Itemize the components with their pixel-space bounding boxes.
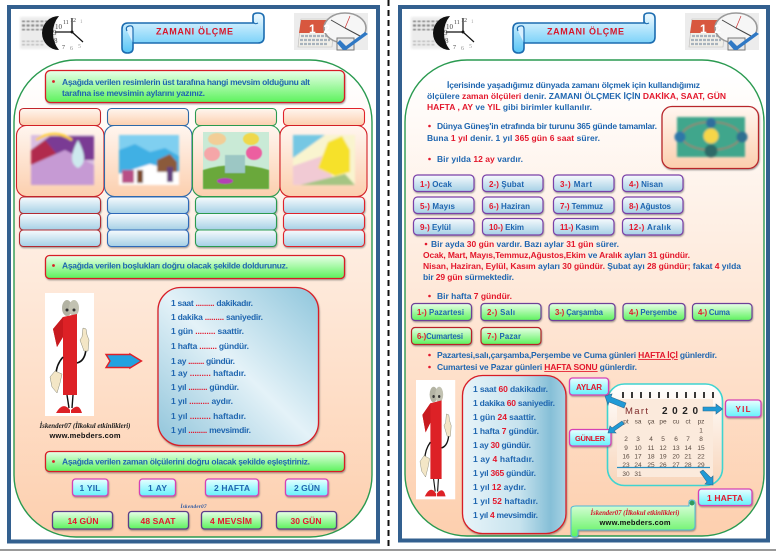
weekday and weekend notes: Pazartesi,salı,çarşamba,Perşembe ve Cuma günleri HAFTA İÇİ günlerdir. [437,350,717,360]
matching top row [72,479,328,496]
calendar: 1 [699,428,703,434]
weekday buttons [412,304,752,344]
calendar: 4 [649,436,653,443]
label AYLAR [570,378,608,395]
calendar: 26 [659,462,667,469]
instruction 2: Aşağıda verilen boşlukları doğru olacak şekilde doldurunuz. [62,260,288,270]
calendar: pt [623,418,629,426]
matching top row: 1 AY [148,483,167,493]
calendar: 17 [634,454,642,460]
fill in the blanks panel: 1 yıl ......... gündür. [171,382,239,392]
fill in the blanks panel: 1 yıl ......... mevsimdir. [171,425,251,435]
instruction 1 [46,70,344,102]
calendar: 20 [672,454,680,460]
January to April: 3-) Mart [560,180,592,189]
arrow to YIL [703,404,722,414]
credit: www.mebders.com [48,431,121,440]
fill in the blanks panel: 1 saat ......... dakikadır. [171,298,253,308]
credit scroll [571,500,695,537]
left header clock image: 5 [78,44,81,50]
left title banner [122,13,264,53]
label YIL: YIL [736,405,751,414]
calendar: 29 [697,462,705,469]
left page border [9,7,378,542]
time units panel: 1 yıl 4 mevsimdir. [473,510,538,520]
calendar: 25 [647,462,655,469]
fill in the blanks panel: 1 ay ........ gündür. [171,356,235,366]
right title banner: ZAMANI ÖLÇME [547,26,624,36]
left header clock image [20,16,83,52]
calendar: 22 [697,454,705,460]
left header clock image: 10 [55,23,62,31]
calendar: 28 [684,462,692,469]
matching bottom row: 48 SAAT [140,516,176,526]
calendar: 2 [624,436,628,443]
right page [400,7,768,540]
mascot number one [416,380,455,499]
left header calendar image [294,13,368,50]
weekdays row: 2-) Salı [487,308,515,317]
arrow to 1 HAFTA [700,470,713,485]
intro paragraph [427,80,726,112]
season picture: winter [104,126,192,196]
arrow to GÜNLER [608,421,624,433]
left header calendar image: 12 [309,22,330,36]
weekdays row: 1-) Pazartesi [417,308,464,317]
September to December: 10-) Ekim [489,223,524,232]
season picture: spring [192,126,280,196]
left title banner: ZAMANI ÖLÇME [156,26,233,36]
calendar: 9 [624,445,628,452]
calendar: ct [685,418,691,426]
matching bottom row: 14 GÜN [68,516,98,526]
weekend row: 6-)Cumartesi [417,332,463,341]
month answer boxes [20,197,364,246]
September to December [414,218,683,235]
page divider [388,0,390,548]
instruction 1: tarafına ise mevsimin aylarını yazınız. [62,88,205,98]
left header clock image: 7 [62,45,65,51]
May to August: 6-) Haziran [489,202,530,211]
calendar: 15 [697,445,705,452]
label 1 HAFTA: 1 HAFTA [707,493,743,503]
left header clock image: 8 [54,37,58,45]
weekdays row: 4-) Perşembe [629,308,678,317]
calendar: 30 [622,471,630,478]
January to April: 4-) Nisan [629,180,663,189]
label AYLAR: AYLAR [576,383,602,392]
matching top row: 1 YIL [80,483,100,493]
calendar: 12 [659,445,667,452]
week fact: Bir hafta 7 gündür. [437,291,512,301]
calendar: 23 [622,462,630,469]
time units panel: 1 yıl 365 gündür. [473,468,536,478]
season picture: rainy autumn [16,126,104,196]
calendar: ça [648,418,655,426]
left header clock image: 6 [70,46,73,52]
weekdays row [412,304,752,320]
time units panel: 1 ay 4 haftadır. [473,454,534,464]
time units panel: 1 saat 60 dakikadır. [473,384,548,394]
months grid [414,175,683,235]
time units panel [462,376,566,534]
fill in the blanks panel: 1 gün ......... saattir. [171,326,244,336]
matching top row: 2 GÜN [294,483,320,493]
time units panel: 1 hafta 7 gündür. [473,426,539,436]
calendar: sa [635,418,642,426]
arrow to AYLAR [605,394,626,408]
calendar: 21 [684,454,692,460]
right header clock image: 5 [469,44,472,50]
right title banner [513,13,655,53]
September to December: 12-) Aralık [629,223,672,232]
intro paragraph: ölçülere zaman ölçüleri denir. ZAMANI ÖLÇMEK İÇİN DAKİKA, SAAT, GÜN [427,91,726,101]
year facts: Dünya Güneş'in etrafında bir turunu 365 günde tamamlar. [437,121,657,131]
calendar: 27 [672,462,680,469]
calendar: Mart [625,406,648,417]
right header clock image: 10 [446,23,454,31]
instruction 3: Aşağıda verilen zaman ölçülerini doğru olacak şekilde eşleştiriniz. [62,456,310,466]
year facts: Bir yılda 12 ay vardır. [437,154,523,164]
arrow [106,354,142,368]
left page [9,7,378,542]
May to August: 7-) Temmuz [560,202,603,211]
season picture: summer [280,126,367,196]
calendar: 24 [634,462,642,469]
left header clock image: 9 [53,29,57,37]
earth orbit picture [662,106,758,168]
weekend row: 7-) Pazar [487,332,521,341]
year facts: Buna 1 yıl denir. 1 yıl 365 gün 6 saat sürer. [427,133,600,143]
credit: İskender07 (İlkokul etkinlikleri) [38,422,130,430]
left main rounded panel [14,60,372,537]
right header clock image: 9 [444,29,448,37]
calendar: 10 [634,445,642,452]
May to August: 8-) Ağustos [629,202,672,211]
fill in the blanks panel [158,288,318,446]
matching bottom row: 4 MEVSİM [210,516,252,526]
right header clock image: 11 [454,20,460,26]
mascot number one [45,293,94,416]
calendar: pe [659,418,667,426]
right header calendar image [685,13,759,50]
time units panel: 1 gün 24 saattir. [473,412,536,422]
month facts paragraph: bir 29 gün sürmektedir. [423,272,514,282]
calendar: 7 [686,436,690,443]
credit scroll: www.mebders.com [598,518,671,527]
calendar: 2 0 2 0 [662,406,698,417]
intro paragraph: İçerisinde yaşadığımız dünyada zamanı ölçmek için kullandığımız [447,80,700,90]
left header clock image: 1 [80,20,83,25]
time units panel: 1 yıl 12 aydır. [473,482,526,492]
fill in the blanks panel: 1 hafta ........ gündür. [171,341,249,351]
instruction 3 [46,452,344,472]
fill in the blanks panel: 1 ay ......... haftadır. [171,368,246,378]
right header clock image [411,16,474,52]
weekday and weekend notes [428,350,717,372]
year facts [427,121,657,164]
month facts paragraph [423,239,741,282]
month facts paragraph: Bir ayda 30 gün vardır. Bazı aylar 31 gün sürer. [431,239,619,249]
calendar: pz [698,418,704,426]
January to April: 1-) Ocak [420,180,453,189]
weekend row [412,328,541,344]
small credit: İskender07 [180,504,207,510]
calendar: 14 [684,445,692,452]
right header calendar image: 12 [700,22,721,36]
calendar: 16 [622,454,630,460]
calendar: 19 [659,454,667,460]
January to April [414,175,683,192]
season name boxes [20,108,364,126]
weekday and weekend notes: Cumartesi ve Pazar günleri HAFTA SONU günlerdir. [437,362,637,372]
matching bottom row: 30 GÜN [290,516,322,526]
label 1 HAFTA [698,489,752,506]
label YIL [726,400,761,417]
calendar: 6 [674,436,678,443]
fill in the blanks panel: 1 dakika ......... saniyedir. [171,312,263,322]
credit scroll: İskender07 (İlkokul etkinlikleri) [590,509,680,517]
left header clock image: 11 [63,20,69,26]
right header clock image: 6 [461,46,464,52]
January to April: 2-) Şubat [489,180,524,189]
month facts paragraph: Nisan, Haziran, Eylül, Kasım ayları 30 gündür. Şubat ayı 28 gündür; fakat 4 yılda [423,261,741,271]
intro paragraph: HAFTA , AY ve YIL gibi birimler kullanılır. [427,102,592,112]
May to August [414,197,683,214]
instruction 2 [46,256,344,278]
fill in the blanks panel: 1 yıl ......... haftadır. [171,411,246,421]
instruction 1: Aşağıda verilen resimlerin üst tarafına hangi mevsim olduğunu alt [62,77,310,87]
right page border [400,7,768,540]
weekdays row: 4-) Cuma [698,308,731,317]
right header clock image: 7 [453,45,456,51]
right main rounded panel [405,60,764,536]
time units panel: 1 dakika 60 saniyedir. [473,398,555,408]
right header clock image: 1 [471,20,474,25]
right header clock image: 12 [461,18,467,24]
September to December: 9-) Eylül [420,223,451,232]
calendar: 3 [636,436,640,443]
month facts paragraph: Ocak, Mart, Mayıs,Temmuz,Ağustos,Ekim ve Aralık ayları 31 gündür. [423,250,690,260]
label GÜNLER [570,430,611,446]
calendar: 11 [648,445,655,452]
calendar: 5 [661,436,665,443]
calendar: 13 [672,445,680,452]
calendar [608,384,722,486]
left header clock image: 12 [70,18,76,24]
weekdays row: 3-) Çarşamba [555,308,604,317]
September to December: 11-) Kasım [560,223,599,232]
calendar: cu [673,418,680,426]
right header clock image: 8 [445,37,449,45]
matching bottom row [52,512,336,529]
calendar: 31 [634,471,642,478]
fill in the blanks panel: 1 yıl ......... aydır. [171,396,233,406]
label GÜNLER: GÜNLER [575,434,606,443]
calendar: 8 [699,436,703,443]
May to August: 5-) Mayıs [420,202,456,211]
matching top row: 2 HAFTA [214,483,250,493]
time units panel: 1 yıl 52 haftadır. [473,496,538,506]
credit [38,422,130,440]
calendar: 18 [647,454,655,460]
time units panel: 1 ay 30 gündür. [473,440,531,450]
